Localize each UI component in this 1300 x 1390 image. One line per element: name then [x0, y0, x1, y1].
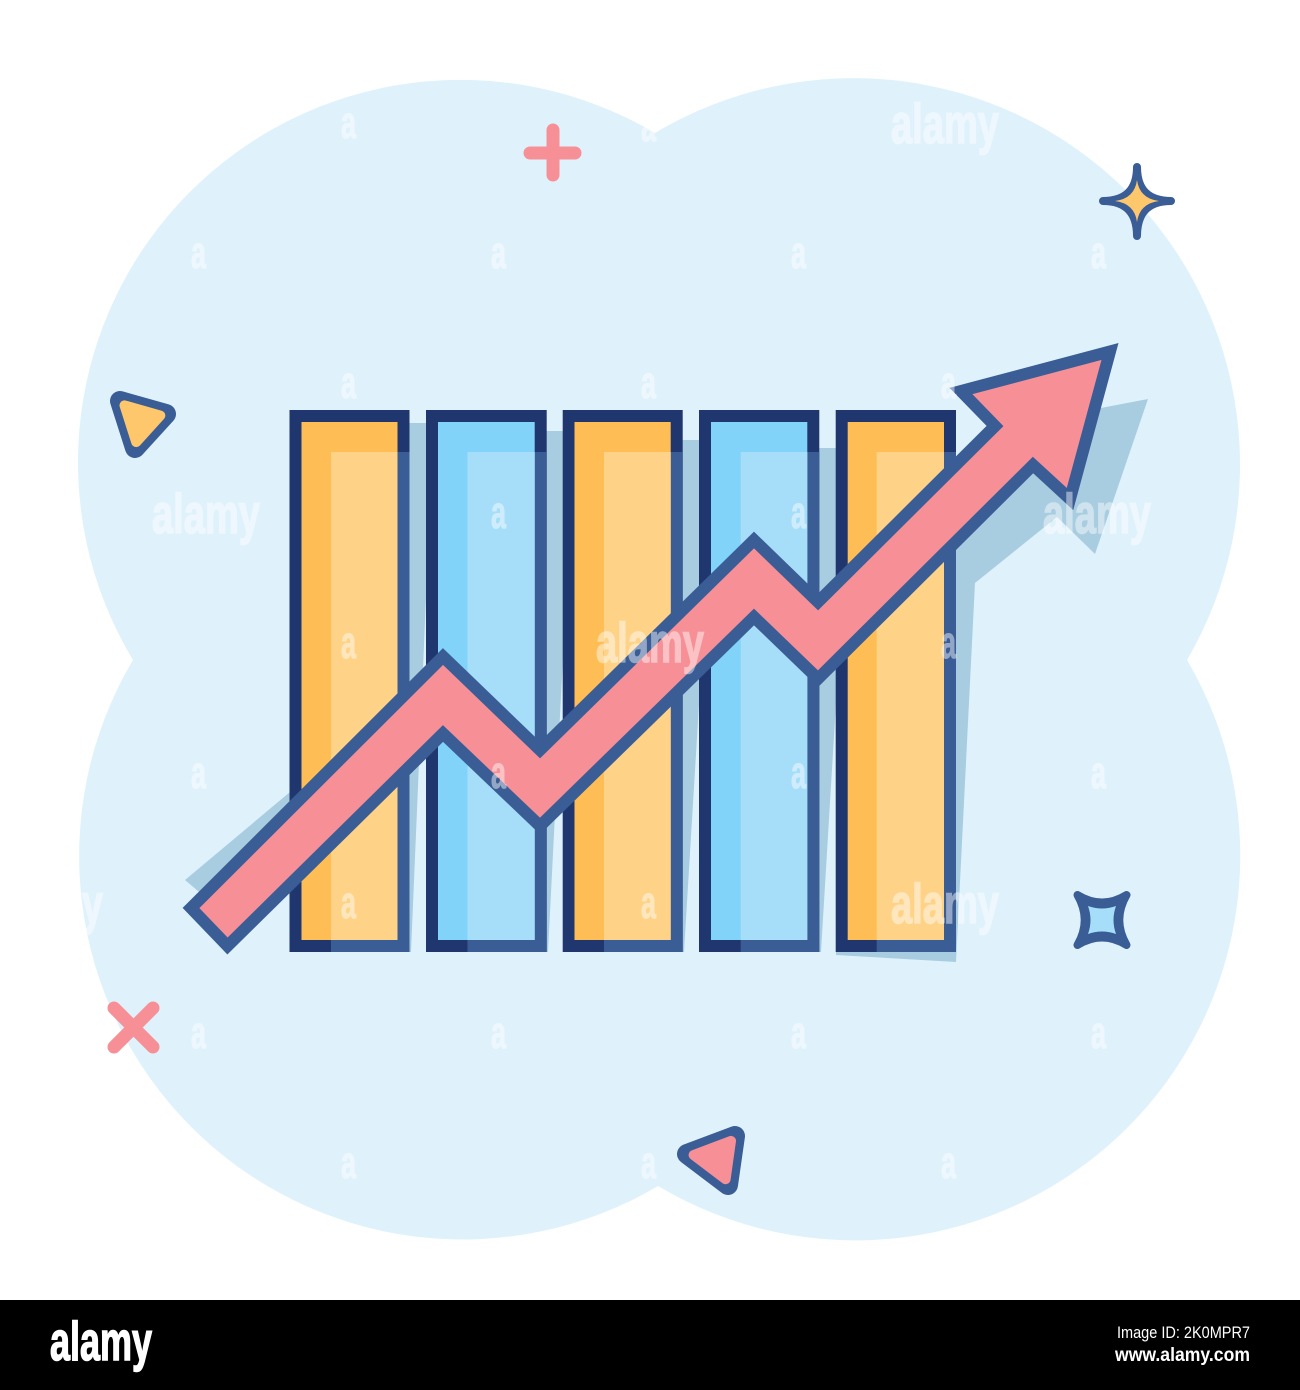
watermark: small repeated letters: a: [791, 747, 807, 798]
watermark: small repeated letters: a: [791, 487, 807, 538]
watermark: small repeated letters: a: [341, 877, 357, 928]
image id: Image ID: 2K0MPR7: [1117, 1323, 1250, 1342]
bar 1 (orange): [290, 410, 410, 952]
watermark: small repeated letters: a: [341, 357, 357, 408]
watermark: small repeated letters: a: [791, 1007, 807, 1058]
watermark: small repeated letters: a: [341, 97, 357, 148]
bar 5 (orange): [836, 410, 956, 952]
bar 3 (orange): [563, 410, 683, 952]
watermark: small repeated letters: a: [941, 1137, 957, 1188]
footer logo: alamy: [50, 1310, 152, 1372]
watermark: small repeated letters: a: [641, 877, 657, 928]
watermark: small repeated letters: a: [641, 100, 657, 151]
watermark: large repeated logo text: alamy: [596, 611, 704, 674]
icon: yellow four-point star: [1103, 167, 1171, 236]
watermark: large repeated logo text: alamy: [891, 872, 999, 935]
icon: pink cross: [114, 1008, 153, 1047]
watermark: small repeated letters: a: [491, 1007, 507, 1058]
icon: pink rounded triangle: [687, 1136, 735, 1185]
watermark: small repeated letters: a: [641, 1137, 657, 1188]
watermark: small repeated letters: a: [941, 617, 957, 668]
watermark: small repeated letters: a: [191, 227, 207, 278]
watermark: small repeated letters: a: [491, 227, 507, 278]
watermark: large repeated logo text: alamy: [152, 482, 260, 545]
watermark: small repeated letters: a: [341, 1137, 357, 1188]
watermark: small repeated letters: a: [341, 617, 357, 668]
watermark: small repeated letters: a: [191, 747, 207, 798]
watermark: small repeated letters: a: [191, 1007, 207, 1058]
icon: pink plus: [530, 130, 575, 175]
watermark: small repeated letters: a: [491, 747, 507, 798]
icon: yellow rounded triangle: [120, 401, 166, 448]
watermark: small repeated letters: a: [941, 357, 957, 408]
watermark: small repeated letters: [191, 97, 1107, 1188]
website: www.alamy.com: [1114, 1345, 1250, 1366]
footer bar: [0, 1300, 1300, 1390]
drop shadow of chart and arrow: [185, 399, 1148, 962]
rising zig-zag arrow: [191, 352, 1110, 946]
watermark: large repeated logo text: alamy: [891, 92, 999, 155]
watermark: large repeated logo text: alamy: [1043, 482, 1151, 545]
watermark: small repeated letters: a: [491, 487, 507, 538]
background blob: four-lobed light blue cloud: [78, 78, 1240, 1240]
watermark: small repeated letters: a: [641, 357, 657, 408]
watermark: small repeated letters: a: [1091, 1007, 1107, 1058]
bar chart: five vertical bars: [290, 410, 956, 952]
watermark: small repeated letters: a: [1091, 227, 1107, 278]
icon: blue four-point star: [1078, 895, 1126, 945]
watermark: large repeated logo text: [0, 92, 1151, 935]
watermark: small repeated letters: a: [791, 227, 807, 278]
bar 2 (blue): [426, 410, 547, 952]
bar 4 (blue): [699, 410, 819, 952]
watermark: small repeated letters: a: [1091, 747, 1107, 798]
